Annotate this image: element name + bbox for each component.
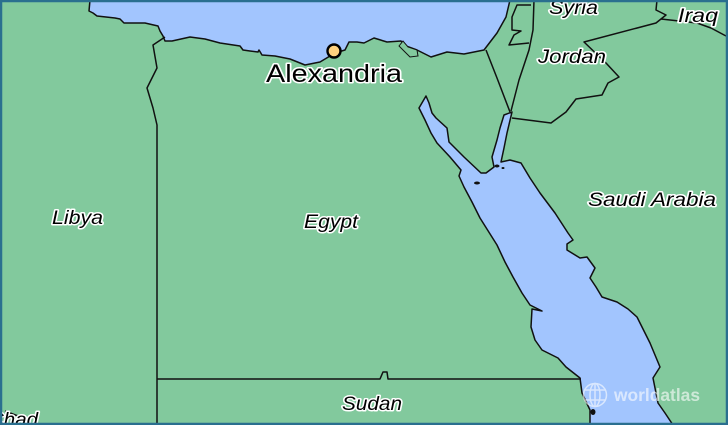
label: Sudan: Sudan — [342, 393, 402, 415]
border: Chad and Libya — [5, 411, 18, 416]
label: Egypt: Egypt — [304, 211, 360, 233]
wordmark: worldatlas — [613, 385, 700, 405]
border: Egypt and Sudan — [157, 372, 581, 379]
label: Alexandria: Alexandria — [266, 60, 402, 88]
Red Sea — [419, 96, 673, 425]
border: Libya and Egypt — [147, 37, 165, 425]
border: Jordan and Saudi Arabia — [512, 0, 666, 123]
city marker: Alexandria — [328, 44, 340, 58]
Mediterranean Sea — [89, 0, 510, 65]
label: Saudi Arabia: Saudi Arabia — [588, 189, 716, 211]
icon: globe — [584, 383, 606, 407]
label: Jordan: Jordan — [537, 46, 606, 68]
border: Iraq and Saudi Arabia — [661, 19, 726, 36]
border: West Bank — [509, 5, 531, 45]
label: Libya: Libya — [52, 207, 103, 229]
label: Iraq: Iraq — [678, 5, 718, 27]
border: Sinai and Israel — [486, 50, 510, 112]
border: Israel and Jordan — [511, 0, 534, 111]
watermark: worldatlas — [584, 383, 700, 407]
Nile delta lake — [399, 41, 418, 57]
islands in the Red Sea — [474, 164, 596, 415]
